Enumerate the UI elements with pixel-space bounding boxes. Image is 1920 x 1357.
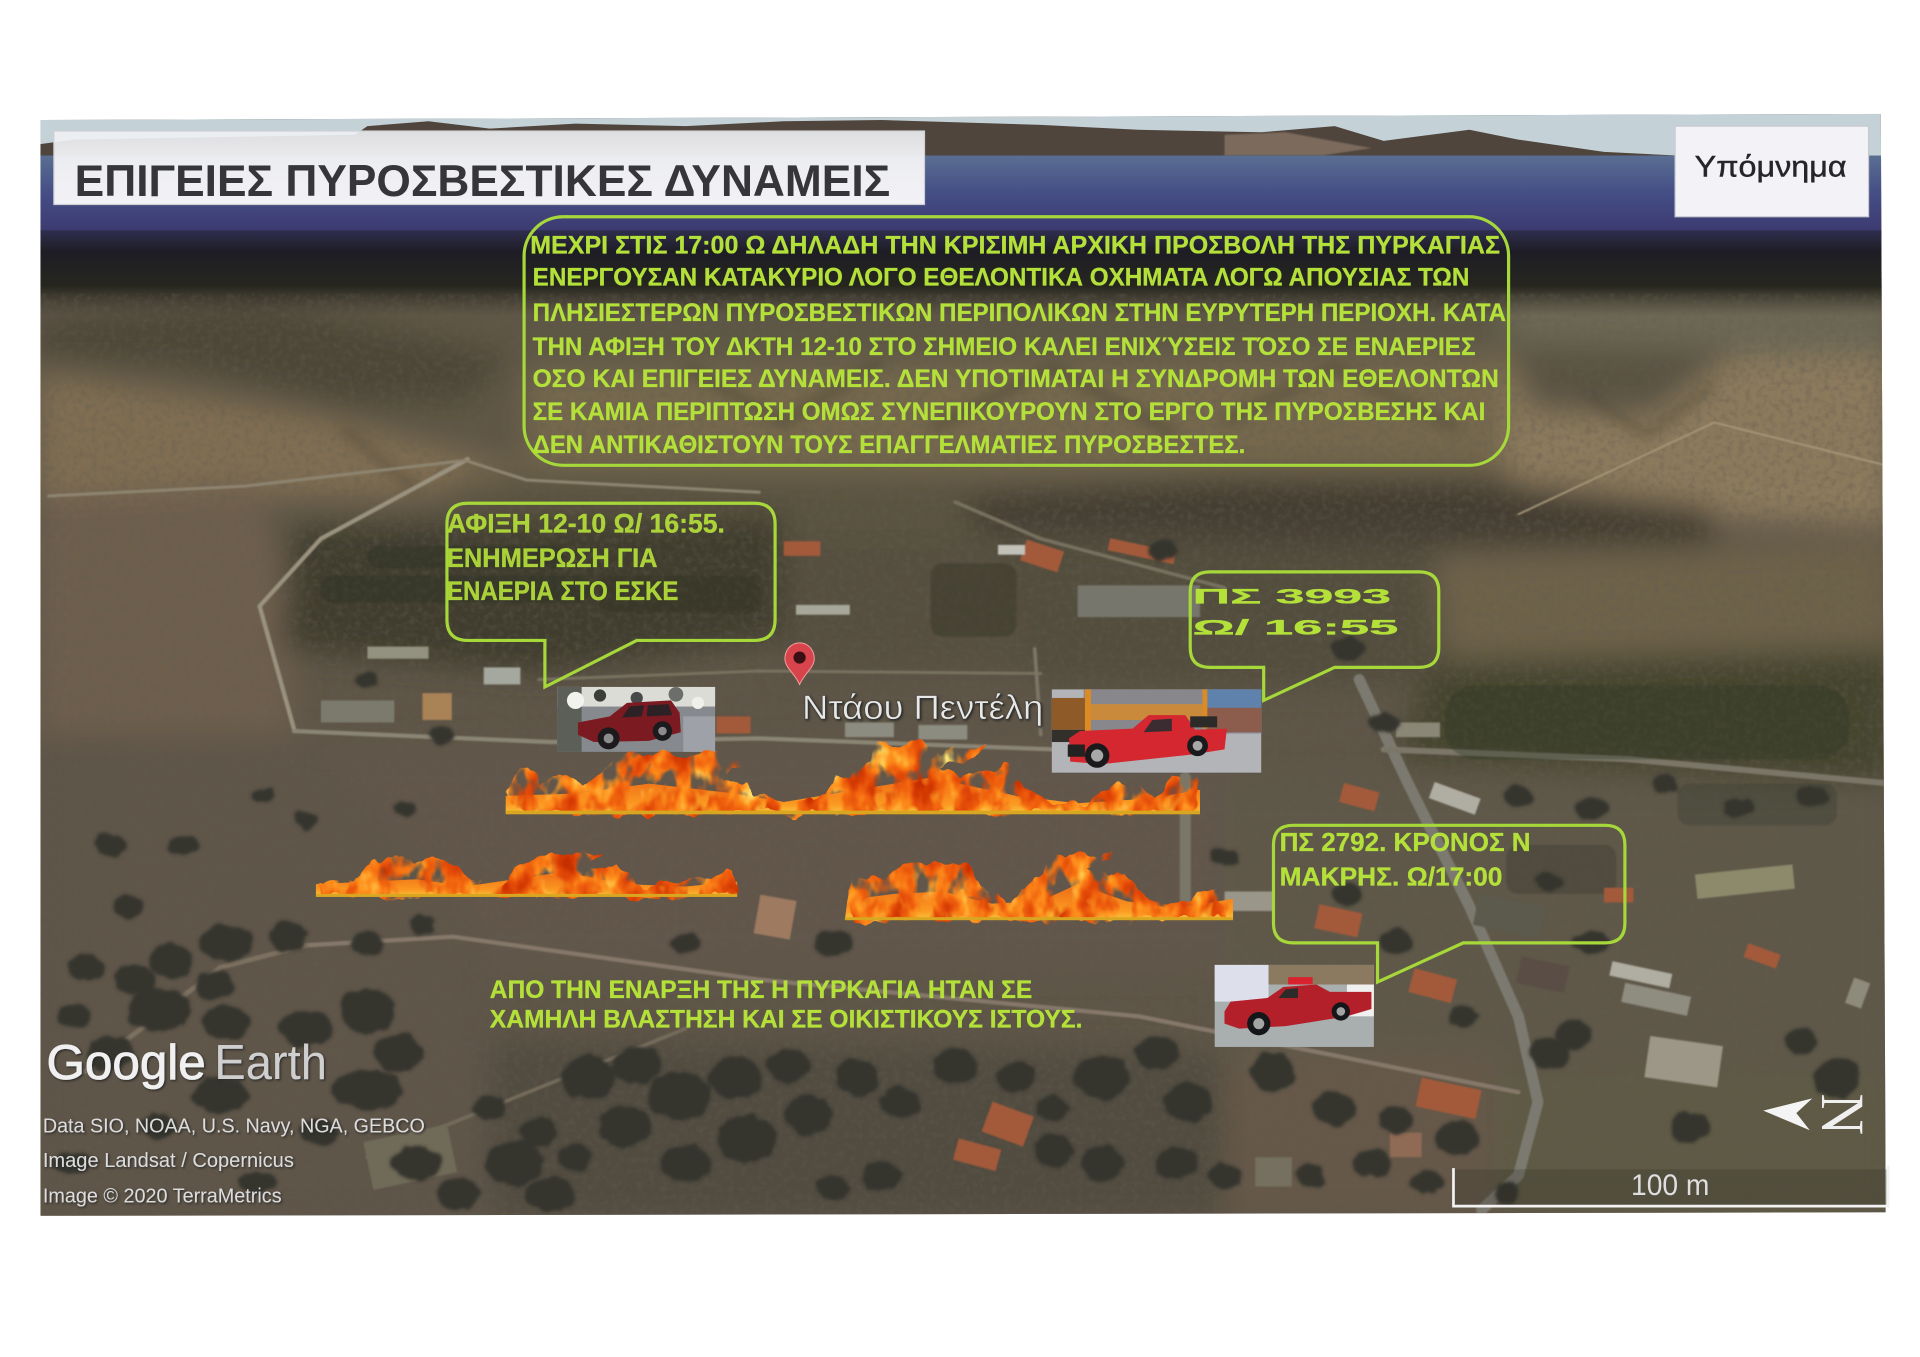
callout: ΠΣ 2792: ΠΣ 2792. ΚΡΟΝΟΣ Ν [1280,829,1531,857]
scale bar: 100 m [1631,1169,1709,1202]
hill valleys [343,361,1714,490]
callout: main analysis: ΜΕΧΡΙ ΣΤΙΣ 17:00 Ω ΔΗΛΑΔΗ ΤΗΝ ΚΡΙΣΙΜΗ ΑΡΧΙΚΗ ΠΡΟΣΒΟΛΗ ΤΗΣ ΠΥΡΚΑΓΙΑΣ [530,231,1500,259]
callout: arrival of 12-10: ΕΝΗΜΕΡΩΣΗ ΓΙΑ [447,543,658,573]
fire line: lower left [316,851,737,897]
map infographic [40,114,1890,1216]
photo: fire truck ΠΣ 2792 [1215,965,1374,1047]
imagery credits: Data SIO, NOAA, U.S. Navy, NGA, GEBCO [43,1116,425,1138]
callout: ΠΣ 2792 [1273,825,1625,982]
mottled terrain noise [37,294,1892,1218]
fire line: upper [506,743,1200,814]
photo: fire truck ΠΣ 3993 [1052,689,1261,773]
buildings and roofs [321,538,1870,1190]
callout: ΠΣ 3993: Ω/ 16:55 [1193,616,1398,639]
dark shoreline band [37,230,1892,316]
title text: ΕΠΙΓΕΙΕΣ ΠΥΡΟΣΒΕΣΤΙΚΕΣ ΔΥΝΑΜΕΙΣ [75,157,890,206]
legend box [1675,126,1869,217]
callout: main analysis [524,217,1509,465]
Google Earth logo [47,1036,327,1090]
callout: main analysis: ΣΕ ΚΑΜΙΑ ΠΕΡΙΠΤΩΣΗ ΟΜΩΣ ΣΥΝΕΠΙΚΟΥΡΟΥΝ ΣΤΟ ΕΡΓΟ ΤΗΣ ΠΥΡΟΣΒΕΣΗΣ ΚΑΙ [533,398,1485,426]
callout: main analysis: ΔΕΝ ΑΝΤΙΚΑΘΙΣΤΟΥΝ ΤΟΥΣ ΕΠΑΓΓΕΛΜΑΤΙΕΣ ΠΥΡΟΣΒΕΣΤΕΣ. [533,431,1245,459]
satellite map background [37,110,1892,1218]
Google Earth logo: Google [47,1036,206,1090]
sea [37,156,1892,236]
legend label: Υπόμνημα [1695,150,1847,183]
callout: arrival of 12-10: ΑΦΙΞΗ 12-10 Ω/ 16:55. [447,509,725,539]
callout: main analysis: ΟΣΟ ΚΑΙ ΕΠΙΓΕΙΕΣ ΔΥΝΑΜΕΙΣ. ΔΕΝ ΥΠΟΤΙΜΑΤΑΙ Η ΣΥΝΔΡΟΜΗ ΤΩΝ ΕΘΕΛΟΝΤΩΝ [533,365,1499,393]
callout: main analysis: ΕΝΕΡΓΟΥΣΑΝ ΚΑΤΑΚΥΡΙΟ ΛΟΓΟ ΕΘΕΛΟΝΤΙΚΑ ΟΧΗΜΑΤΑ ΛΟΓΩ ΑΠΟΥΣΙΑΣ ΤΩΝ [533,263,1469,291]
place label: Ντάου Πεντέλη [802,689,1043,727]
vegetation note: ΧΑΜΗΛΗ ΒΛΑΣΤΗΣΗ ΚΑΙ ΣΕ ΟΙΚΙΣΤΙΚΟΥΣ ΙΣΤΟΥΣ. [490,1005,1082,1033]
Google Earth logo: Earth [214,1036,327,1090]
icon: north arrow [1763,1093,1876,1135]
vegetation note: ΑΠΟ ΤΗΝ ΕΝΑΡΞΗ ΤΗΣ Η ΠΥΡΚΑΓΙΑ ΗΤΑΝ ΣΕ [490,976,1032,1004]
callout: ΠΣ 3993 [1190,572,1439,700]
olive groves [321,546,1849,894]
fire line: lower right [845,851,1233,920]
imagery credits: Image Landsat / Copernicus [43,1150,294,1172]
vegetation note [490,976,1082,1033]
tree clusters [54,541,1861,1211]
icon: map pin [785,643,814,684]
imagery credits [43,1116,425,1207]
hillside terrain patches [37,277,1892,1216]
callout: arrival of 12-10 [447,503,775,687]
callout: ΠΣ 2792: ΜΑΚΡΗΣ. Ω/17:00 [1280,863,1502,891]
callout: ΠΣ 3993: ΠΣ 3993 [1193,586,1391,609]
sky [40,114,1881,156]
photo: volunteer vehicle [557,687,715,752]
callout: main analysis: ΠΛΗΣΙΕΣΤΕΡΩΝ ΠΥΡΟΣΒΕΣΤΙΚΩΝ ΠΕΡΙΠΟΛΙΚΩΝ ΣΤΗΝ ΕΥΡΥΤΕΡΗ ΠΕΡΙΟΧΗ. ΚΑΤΑ [533,299,1506,327]
scale bar [1453,1166,1888,1206]
distant mountains [37,120,1886,162]
icon: north arrow: N [1808,1093,1876,1135]
roads [49,422,1892,1210]
callout: main analysis: ΤΗΝ ΑΦΙΞΗ ΤΟΥ ΔΚΤΗ 12-10 ΣΤΟ ΣΗΜΕΙΟ ΚΑΛΕΙ ΕΝΙΧΎΣΕΙΣ ΤΌΣΟ ΣΕ ΕΝΑΕΡΙΕΣ [533,333,1476,361]
callout: arrival of 12-10: ΕΝΑΕΡΙΑ ΣΤΟ ΕΣΚΕ [447,576,678,606]
title panel [54,131,924,206]
imagery credits: Image © 2020 TerraMetrics [43,1185,282,1207]
